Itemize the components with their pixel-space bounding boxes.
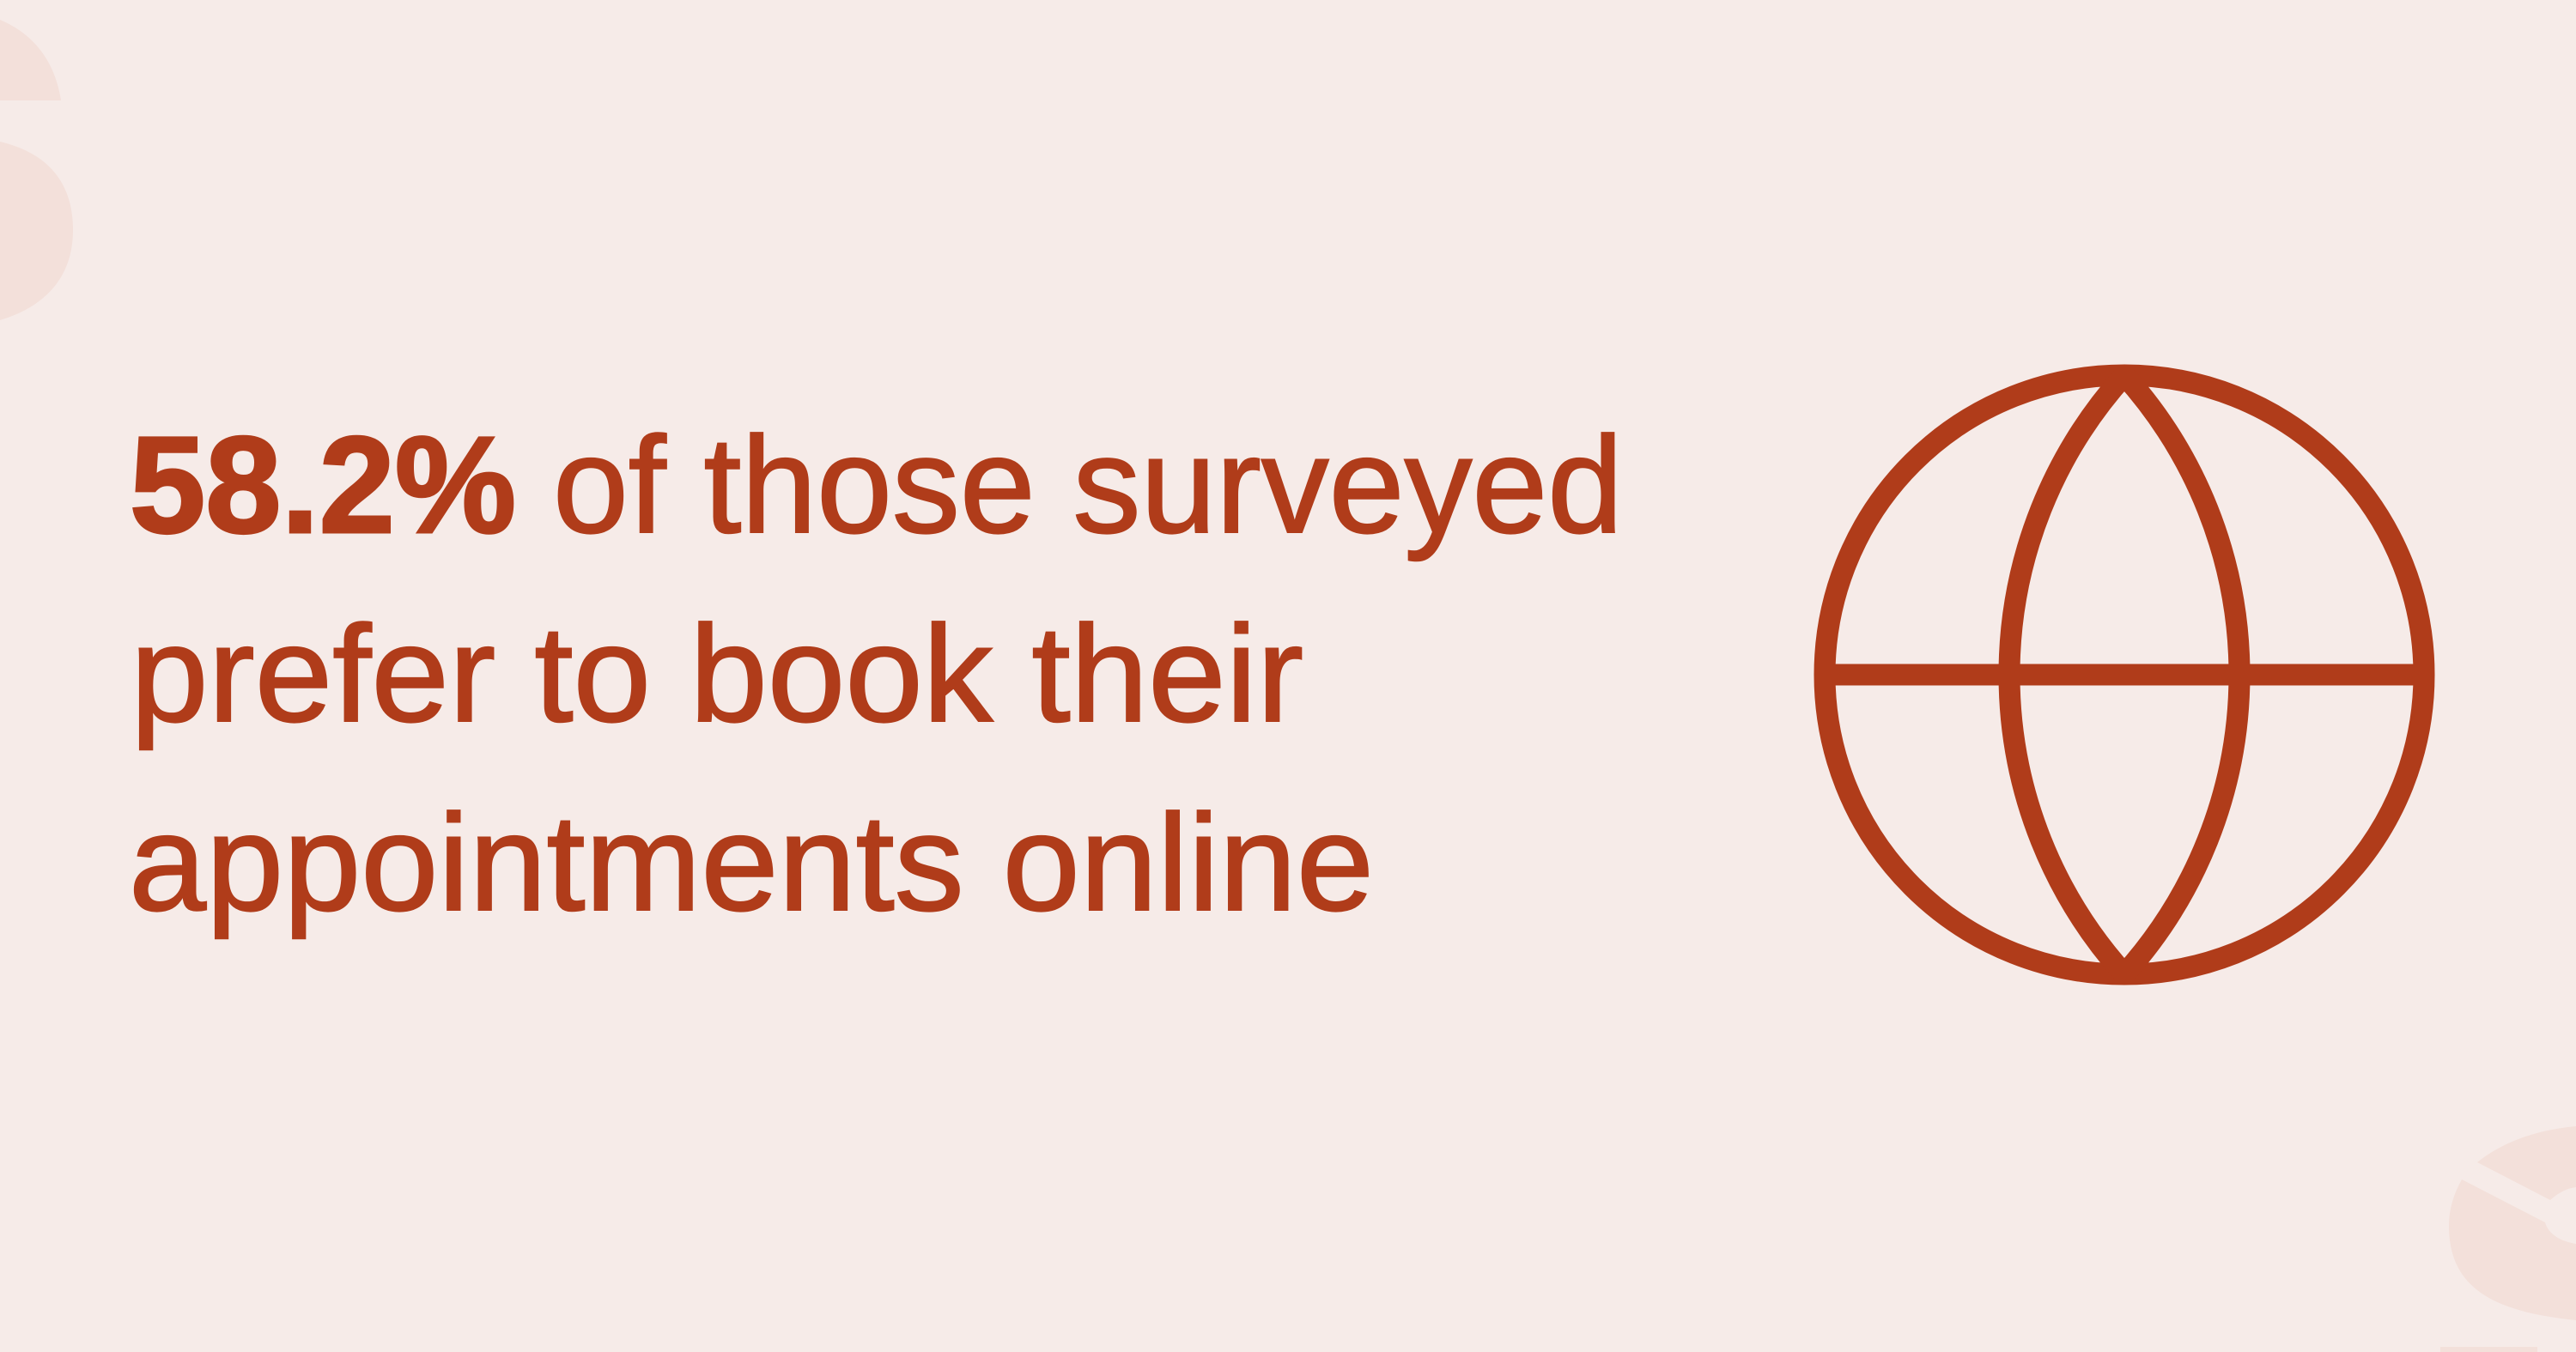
line 1: of those surveyed: [553, 408, 1623, 561]
icon: globe: [1825, 375, 2424, 974]
statistic: 58.2%: 58.2%: [130, 408, 516, 561]
headline text: [129, 408, 1623, 939]
line 2: prefer to book their: [131, 597, 1303, 750]
line 3: appointments online: [129, 785, 1374, 939]
